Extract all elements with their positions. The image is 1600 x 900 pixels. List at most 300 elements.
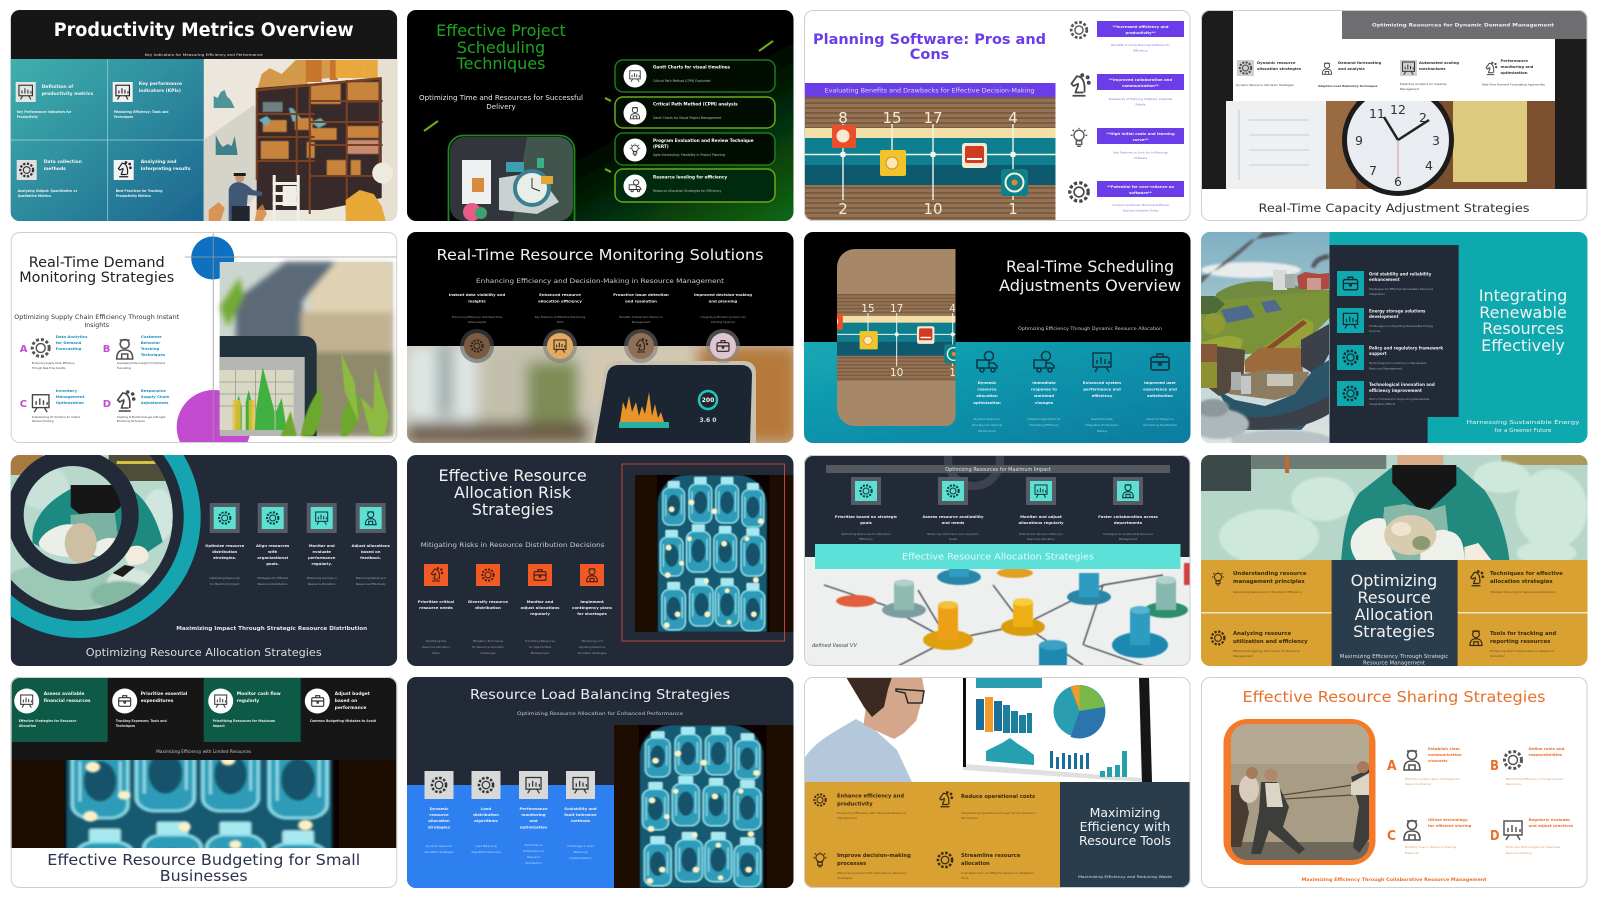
step: adjust: based on [335, 698, 357, 704]
column: contingency: Monitoring and [581, 639, 603, 643]
item: improved collaboration: Pitfalls [1136, 102, 1146, 106]
item: over-reliance: Options Available Today [1123, 208, 1159, 212]
column: dynamic allocation: strategies [428, 824, 451, 830]
item B: Define roles and [1528, 746, 1565, 751]
item: decision making: Maximizing Output with Data-Driven Resource [837, 871, 907, 875]
item A: Establish clear [1428, 746, 1460, 751]
metric: KPI note: Techniques [114, 115, 133, 119]
subtitle: Optimizing Supply Chain Efficiency Through Instant [14, 314, 180, 321]
image: glowing jars [635, 475, 794, 632]
item D: D [103, 399, 111, 410]
step: monitor: Impact [213, 724, 225, 728]
item B: Tracking [141, 346, 159, 351]
step: optimize: Optimize resource [205, 543, 245, 548]
item C: Utilize technology [1428, 817, 1468, 822]
column: dynamic allocation: allocation [428, 818, 450, 823]
item: energy storage: Sources [1369, 329, 1381, 333]
slide 7: real-time scheduling adjustments [804, 232, 1190, 443]
step: align [256, 503, 290, 586]
column: visibility [449, 292, 505, 363]
image: blurred office with tablet: 3.6 0 [700, 417, 716, 424]
item C: Demand Tracking [32, 419, 54, 423]
column: prioritize: Prioritize critical [418, 599, 454, 604]
item D: Monitoring Techniques [117, 419, 145, 423]
step: adjust: performance [335, 705, 366, 711]
item B [1490, 746, 1565, 786]
item D: Adjustments [141, 400, 169, 405]
step: optimize: strategies. [213, 555, 237, 560]
column: diversify: for Resource Allocation [472, 645, 504, 649]
item B: Leveraging Data Analytics for Demand [117, 361, 166, 365]
step: monitor: evaluate [312, 549, 331, 554]
blue panel [407, 785, 614, 888]
item: tools: Allocation [1490, 654, 1505, 658]
frame [622, 464, 784, 641]
column: collaborate: Strategies for Sustainable Resource [1103, 532, 1153, 536]
column: scalability: Challenges in Load [567, 844, 594, 848]
metric: KPI text: Key performance [139, 81, 182, 87]
item: increased efficiency: Benefits of Using Planning Software for [1111, 43, 1171, 47]
column: system performance [1083, 353, 1121, 433]
column: issue detection: Management [632, 320, 651, 324]
column: prioritize: goals [860, 520, 873, 525]
column: visibility: Data Insights [468, 320, 487, 324]
item: enhance efficiency: productivity [837, 802, 873, 808]
item: grid stability: Integration [1369, 292, 1385, 296]
column: performance monitoring: Performance [525, 843, 543, 847]
step: align: Strategies for Efficient [257, 576, 289, 580]
step: monitor [204, 677, 301, 742]
step: adjust: based on [361, 549, 381, 554]
item: performance monitoring: Performance [1500, 58, 1528, 63]
column: allocation [535, 292, 585, 363]
title: Effectively [1481, 336, 1565, 355]
item: energy storage: development [1369, 314, 1399, 319]
column: load distribution: Load [481, 806, 491, 811]
metric: definition text: productivity metrics [42, 91, 93, 97]
item: automated scaling: Predictive Analytics for Capacity [1400, 82, 1447, 86]
item: streamline: Streamline resource [961, 853, 1021, 859]
item: streamline: Tools [960, 876, 969, 880]
column: prioritize [835, 477, 898, 541]
column: monitor: Management [531, 651, 550, 655]
center panel [1332, 560, 1458, 666]
step: monitor [307, 503, 337, 586]
column: assess [922, 477, 984, 541]
item: dynamic allocation: Dynamic resource [1257, 60, 1296, 65]
title: Resource Tools [1079, 833, 1171, 848]
step: align: Resource Distribution [258, 582, 288, 586]
step: monitor: regularly [237, 698, 259, 704]
decorations [424, 41, 773, 172]
column: scalability: Scalability and [564, 806, 597, 811]
item: performance monitoring: Real-Time Demand Forecasting Approaches [1482, 82, 1545, 86]
item: analyzing [1212, 631, 1308, 658]
column: dynamic allocation [972, 352, 1002, 433]
image: clock on wooden table: 9 [1355, 133, 1363, 148]
slide 3: planning software pros and cons [804, 10, 1190, 221]
column: assess: Assess resource availability [922, 514, 984, 519]
item D [103, 388, 170, 423]
item: streamline: allocation [961, 861, 990, 867]
item A: Data Analytics [56, 334, 88, 339]
panel: dark title [1060, 782, 1190, 888]
column: allocation: Key Features of Effective Monitoring [535, 315, 585, 319]
column: dynamic allocation: Dynamic [978, 380, 997, 385]
step: align: with [268, 549, 278, 554]
column: dynamic allocation: Performance [978, 429, 996, 433]
slide 5: real-time demand monitoring [11, 232, 397, 464]
item D: Resource Sharing [1506, 851, 1532, 855]
title: Productivity Metrics Overview [54, 20, 354, 41]
column: dynamic allocation: Dynamic [430, 806, 449, 811]
column: performance monitoring: Resource [527, 855, 540, 859]
title: Monitoring Strategies [19, 270, 174, 286]
subtitle: Maximizing Efficiency with Limited Resources [156, 749, 251, 754]
title: Allocation Risk [454, 483, 572, 502]
image: glowing jars [614, 725, 794, 888]
header band [407, 232, 794, 346]
decoration: blue circle [191, 236, 234, 280]
header bar: Optimizing Resources for Dynamic Demand Management [1372, 22, 1555, 28]
column: allocation: allocation efficiency [538, 298, 582, 304]
item: over-reliance: software** [1129, 190, 1152, 195]
slide 11: effective resource allocation strategies [804, 434, 1192, 666]
image: clock on wooden table [1226, 101, 1555, 196]
column: system performance: efficiency [1092, 393, 1113, 398]
item: high initial costs [1071, 128, 1184, 160]
title: Effective Resource [438, 466, 587, 485]
column: performance monitoring: monitoring [521, 812, 546, 817]
item: grid stability [1337, 271, 1433, 296]
title: Resources [1482, 319, 1564, 338]
image: network of pegs: defined Vassal VV [812, 643, 857, 649]
column: performance monitoring: Distribution [525, 861, 542, 865]
step: assess: Assess available [44, 691, 84, 697]
title: Real-Time Capacity Adjustment Strategies [1258, 201, 1530, 215]
item: automated scaling: Management [1400, 87, 1420, 91]
column: prioritize: Identifying Key [426, 639, 447, 643]
metric: analyzing text: interpreting results [141, 166, 191, 172]
step: monitor: Measuring Success in [307, 576, 337, 580]
illustration: calendar and clock [448, 134, 576, 221]
item: analyzing: Effective Budgeting Techniques for Resource [1233, 649, 1300, 653]
step: monitor: Monitor cash flow [237, 691, 281, 697]
item: tools: reporting resources [1490, 639, 1550, 645]
step: assess: Effective Strategies for Resource [19, 719, 76, 723]
subtitle: Enhancing Efficiency and Decision-Making in Resource Management [476, 278, 725, 285]
item C: Networks [1405, 851, 1420, 855]
step: prioritize: expenditures [141, 698, 174, 704]
title: Cons [910, 47, 949, 63]
column: system performance: Making [1097, 429, 1107, 433]
item D: and adjust practices [1528, 823, 1574, 828]
column: monitor: Monitor and [527, 599, 554, 604]
subtitle: Optimizing Resource Allocation for Enhanced Performance [517, 711, 683, 717]
image: clock on wooden table: 2 [1419, 110, 1427, 125]
title: Strategies [472, 500, 553, 519]
column: contingency: for shortages [577, 611, 607, 616]
subtitle: Maximizing Impact Through Strategic Resource Distribution [176, 626, 368, 632]
item D: Tools and Technologies for Seamless [1505, 845, 1561, 849]
column: decision making: Integrating Monitoring Tools into [700, 315, 746, 319]
title: Adjustments Overview [999, 276, 1181, 295]
column: performance monitoring: optimization [520, 824, 548, 830]
column: scalability: methods [571, 818, 591, 823]
header band [804, 455, 1190, 557]
metric: definition note: Key Performance Indicators for [17, 110, 72, 114]
card: PERT [615, 133, 775, 165]
column: dynamic allocation: optimization [973, 400, 1001, 405]
column: dynamic allocation: resource [429, 812, 449, 817]
card: resource leveling: Resource Allocation Strategies for Efficiency [653, 189, 721, 193]
item: performance monitoring [1482, 58, 1545, 86]
column: dynamic allocation: allocation [976, 393, 998, 398]
item B: Customer [141, 334, 162, 339]
item: policy framework: Resource Management [1369, 366, 1403, 370]
subtitle: Resource Management [1363, 660, 1425, 666]
title: Scheduling [457, 38, 545, 57]
item: increased efficiency: Efficiency [1133, 48, 1148, 52]
item: increased efficiency [1071, 21, 1184, 52]
column: issue detection: and resolution [625, 298, 657, 304]
image: clock on wooden table: 11 [1369, 106, 1385, 121]
column: prioritize [418, 564, 454, 655]
column: dynamic allocation: Dynamic Resource [426, 844, 452, 848]
title: Renewable [1479, 303, 1567, 322]
column: monitor: regularly [530, 611, 550, 616]
title: Effective Project [436, 21, 566, 40]
column: contingency: Adjusting Resource [579, 645, 606, 649]
column: system performance: Enhanced system [1083, 380, 1121, 385]
subtitle band: Evaluating Benefits and Drawbacks for Effective Decision-Making [824, 88, 1035, 94]
column: dynamic allocation: resource [977, 386, 997, 392]
item A: A [20, 344, 28, 355]
item D: Regularly evaluate [1528, 817, 1570, 822]
item: enhance efficiency: Management [837, 816, 858, 820]
column: scalability: Implementation [569, 856, 592, 860]
step: prioritize: Prioritize essential [141, 691, 188, 697]
subtitle: Optimizing Time and Resources for Successful [419, 93, 583, 102]
step: assess: Allocation [19, 724, 36, 728]
metric: KPI text: indicators (KPIs) [139, 88, 181, 94]
metric: data collection text: methods [44, 166, 66, 172]
step: align: organizational [257, 555, 288, 560]
item: reduce costs: Streamlining Operations through Smart Allocation [961, 811, 1036, 815]
item: energy storage: Challenges in Integrating Renewable Energy [1369, 324, 1433, 328]
column: system performance: performance and [1083, 386, 1121, 392]
title: Maximizing [1090, 805, 1160, 820]
step: monitor: Monitor and [309, 543, 335, 548]
item: analyzing: Analyzing resource [1233, 631, 1291, 637]
item: decision making: processes [837, 861, 866, 867]
column: issue detection [613, 292, 669, 363]
item: techniques [1471, 571, 1563, 594]
item: technological innovation: Policy Frameworks Supporting Renewable [1369, 397, 1430, 401]
card: gantt charts: Critical Path Method (CPM) Explained [653, 79, 710, 83]
item: analyzing: utilization and efficiency [1233, 639, 1308, 645]
item: dynamic allocation [1236, 60, 1302, 87]
metric: analyzing note: Best Practices for Tracking [116, 189, 162, 193]
column: immediate response: response to [1031, 386, 1057, 392]
metric: analyzing text: Analyzing and [141, 159, 177, 165]
column: decision making [694, 292, 752, 363]
image: worker with bags [1201, 455, 1588, 565]
subtitle: Insights [84, 322, 109, 329]
item A: Effective Collaboration Strategies for [1405, 777, 1461, 781]
step: align: Align resources [256, 543, 290, 548]
column: issue detection: Proactive issue detection [613, 292, 669, 297]
column: monitor: allocations regularly [1018, 520, 1064, 525]
step: monitor: Prioritizing Resources for Maximum [213, 719, 275, 723]
item D: Adapting to Market Changes with Agile [117, 415, 166, 419]
item A: Resource Sharing [1405, 782, 1431, 786]
column: user experience: experience and [1143, 386, 1177, 392]
metric: KPI note: Measuring Efficiency: Tools and [114, 110, 168, 114]
item C: Inventory [56, 388, 77, 393]
slide 2: project scheduling techniques [407, 10, 794, 236]
icon: analyzing [114, 160, 134, 180]
column: immediate response [1027, 352, 1061, 427]
column: collaborate [1098, 477, 1159, 541]
item B [103, 334, 166, 370]
panel: metrics grid [11, 59, 204, 221]
column: monitor: Data-Driven Decision Making in [1019, 532, 1063, 536]
title: Real-Time Demand [29, 255, 165, 271]
image: tug of war [1224, 719, 1376, 865]
item B: B [103, 344, 110, 355]
item C: for efficient sharing [1428, 823, 1472, 828]
item: improved collaboration: communication** [1122, 83, 1159, 88]
card: critical path: Critical Path Method (CPM) analysis [653, 102, 738, 106]
metric: data collection note: Qualitative Metrics [18, 194, 51, 198]
item: technological innovation: Integration Efforts [1369, 402, 1396, 406]
title: Integrating [1479, 286, 1567, 305]
subtitle bar [826, 465, 1170, 473]
slide 1: productivity metrics overview [11, 10, 397, 221]
item: energy storage: Energy storage solutions [1369, 308, 1426, 314]
column: monitor [1018, 477, 1064, 541]
card: PERT: Program Evaluation and Review Technique [653, 138, 754, 143]
subtitle: Key Indicators for Measuring Efficiency and Performance [145, 52, 263, 57]
column: decision making: and planning [709, 298, 738, 304]
card: PERT: (PERT) [653, 144, 669, 149]
title: Techniques [456, 54, 545, 73]
item: understanding: Understanding resource [1233, 571, 1307, 577]
item: demand forecasting: Adaptive Load Balancing Techniques [1318, 84, 1378, 88]
column: prioritize: Resource Allocation [422, 645, 450, 649]
column: load distribution: Load Balancing [475, 844, 497, 848]
decoration: purple circle [177, 390, 251, 464]
icon: definition [16, 82, 36, 102]
column: user experience: Improved user [1144, 380, 1176, 385]
column: scalability: Balancing [574, 850, 588, 854]
column: visibility: insights [468, 298, 486, 304]
image: blurred office with tablet: 200 [702, 397, 714, 404]
subtitle: Optimizing Efficiency Through Dynamic Resource Allocation [1018, 326, 1162, 331]
column: diversify [468, 564, 508, 655]
item: understanding: Optimizing Resources for Maximum Efficiency [1233, 590, 1302, 594]
column: assess: Goals [949, 537, 957, 541]
item: over-reliance [1070, 181, 1184, 212]
item A: channels [1428, 758, 1448, 763]
item A: communication [1428, 752, 1462, 757]
item: over-reliance: **Potential for over-reliance on [1107, 184, 1174, 189]
panel: gold items [804, 782, 1060, 888]
item: streamline [938, 853, 1034, 880]
column: monitor: for Optimal Risk [529, 645, 552, 649]
slide 8: integrating renewable resources [1189, 232, 1588, 450]
item: demand forecasting [1318, 60, 1382, 88]
item: enhance efficiency: Enhancing Efficiency with Advanced Resource [837, 811, 906, 815]
card: critical path [615, 97, 775, 128]
column: immediate response: Immediate [1032, 380, 1056, 385]
item: analyzing: Management [1233, 654, 1254, 658]
item: policy framework: Technological Innovations in Renewable [1368, 361, 1427, 365]
image: clock on wooden table: 7 [1369, 163, 1377, 178]
column: user experience [1143, 354, 1177, 427]
image: house and tablet [220, 262, 393, 436]
step: optimize [205, 503, 245, 586]
column: dynamic allocation: Allocation for Optimal [972, 423, 1002, 427]
metric: definition note: Productivity [17, 115, 38, 119]
column: visibility: Instant data visibility and [449, 292, 505, 297]
image: analyst at monitor [804, 677, 1152, 782]
item B: B [1490, 759, 1499, 774]
column: assess: Balancing Short-term and Long-term [927, 532, 979, 536]
metric: definition text: Definition of [42, 84, 73, 90]
column: monitor: Monitor and adjust [1020, 514, 1062, 519]
image: landscape cross-section [1189, 232, 1331, 450]
item: streamline: Cost Reduction via Effective Resource Utilization [961, 871, 1034, 875]
step: adjust: Adjust budget [335, 691, 370, 697]
item: energy storage [1337, 308, 1433, 333]
item: automated scaling [1400, 60, 1459, 91]
column: collaborate: Management [1119, 537, 1138, 541]
panel: strategies [1233, 10, 1555, 101]
title: Resource [1357, 588, 1431, 607]
subtitle: for a Greener Future [1495, 428, 1552, 434]
column: load distribution: Algorithms Overview [471, 850, 501, 854]
column: contingency: contingency plans [572, 605, 613, 610]
column: prioritize: Prioritize based on strategic [835, 514, 898, 519]
column: collaborate: departments [1114, 520, 1143, 525]
item B: Behavior [141, 340, 160, 345]
item: high initial costs: Software [1134, 156, 1147, 160]
slide 13: resource budgeting for small businesses [11, 637, 397, 900]
slide 15: maximizing efficiency with resource tools [804, 677, 1190, 888]
item: high initial costs: **High initial costs and learning [1106, 131, 1175, 136]
column: diversify: Mitigation Techniques [473, 639, 504, 643]
item: automated scaling: Automated scaling [1419, 60, 1459, 65]
column: monitor: Prioritizing Resources [525, 639, 556, 643]
step: adjust: feedback. [360, 555, 382, 560]
item: technological innovation: efficiency improvement [1369, 388, 1422, 393]
item: enhance efficiency: Enhance efficiency and [837, 794, 904, 800]
item: techniques: allocation strategies [1490, 579, 1553, 585]
item C [1387, 817, 1472, 855]
column: dynamic allocation: Dynamic Resource [974, 417, 1000, 421]
item: demand forecasting: and analysis [1338, 66, 1365, 71]
item D: Responsive [141, 388, 166, 393]
item: tools [1470, 631, 1556, 658]
column: performance monitoring: and [529, 818, 538, 823]
panel: dark list [1330, 245, 1459, 443]
item C: C [1387, 829, 1396, 844]
decoration: teal ring [0, 404, 192, 630]
illustration: warehouse shelves [204, 59, 397, 221]
step: adjust: Common Budgeting Mistakes to Avoid [310, 719, 376, 723]
